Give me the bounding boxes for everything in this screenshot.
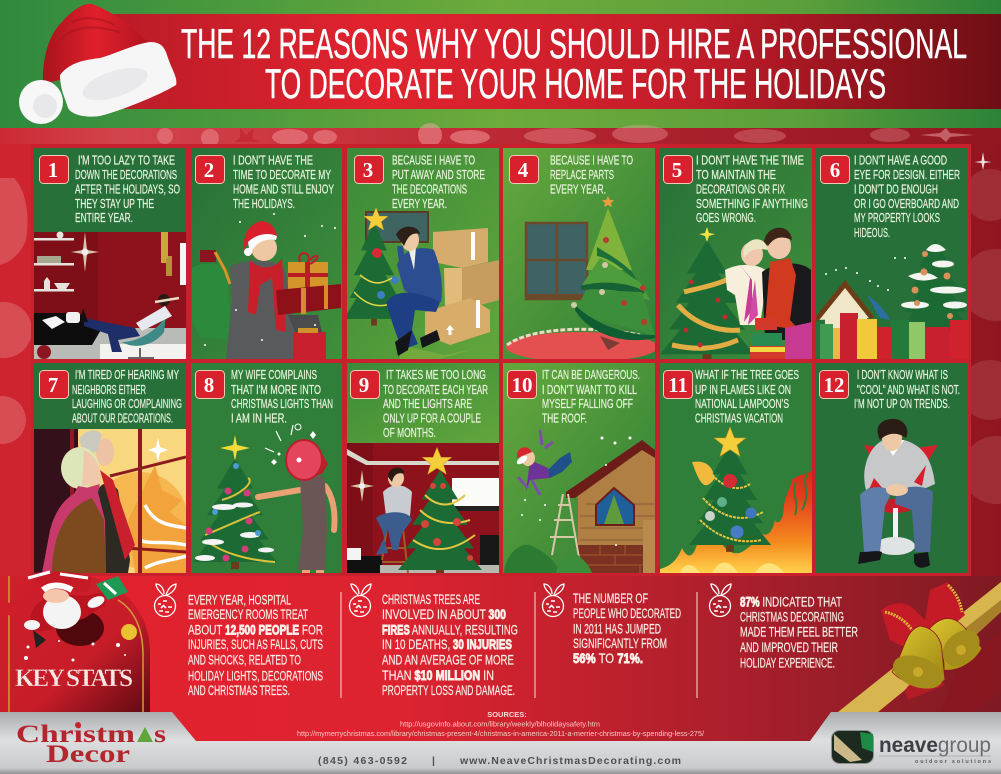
illustration: tree in flames	[660, 427, 812, 573]
illustration: window and cartoon tree	[506, 196, 658, 362]
reason text	[72, 367, 182, 426]
stat 3: IN 2011 HAS JUMPED	[573, 620, 661, 636]
illustration: house, snowy tree and gifts	[816, 240, 973, 359]
title	[181, 20, 967, 107]
reason text: I AM IN HER.	[231, 410, 287, 426]
sources: http://usgovinfo.about.com/library/weekly/blholidaysafety.htm	[400, 722, 600, 728]
reason text	[75, 152, 180, 225]
panel: reason 10	[503, 363, 655, 573]
panel: reason 12	[816, 363, 968, 573]
number badge	[820, 156, 850, 184]
reason text	[383, 367, 488, 440]
stat 1: AND CHRISTMAS TREES.	[188, 682, 290, 698]
panel: reason 7	[34, 363, 188, 573]
reason text: I DON'T KNOW WHAT IS	[857, 367, 948, 382]
reason text: EVERY YEAR.	[392, 196, 447, 211]
reason text: DOWN THE DECORATIONS	[75, 167, 177, 182]
stat 4: HOLIDAY EXPERIENCE.	[740, 654, 835, 670]
number badge: 2	[204, 158, 214, 182]
number badge: 12	[824, 373, 844, 397]
reason text: THE HOLIDAYS.	[233, 196, 295, 211]
number badge	[664, 156, 692, 184]
number badge: 6	[830, 158, 840, 182]
logo: neave group	[832, 730, 991, 765]
panel: key stats banner	[0, 571, 150, 712]
sources	[297, 710, 704, 738]
reason text: BECAUSE I HAVE TO	[392, 152, 475, 168]
stat 3: PEOPLE WHO DECORATED	[573, 605, 681, 621]
logo: christmas decor	[16, 721, 166, 768]
illustration: man on ladder by the tree	[347, 443, 499, 577]
reason text: THE DECORATIONS	[392, 182, 467, 196]
reason text: I DON'T WANT TO KILL	[542, 382, 637, 397]
number badge: 8	[204, 373, 214, 397]
reason text	[392, 152, 485, 211]
stat 1: ABOUT 12,500 PEOPLE FOR	[188, 622, 323, 638]
reason text: AND THE LIGHTS ARE	[383, 396, 472, 411]
reason text: PUT AWAY AND STORE	[392, 167, 485, 182]
panel frame	[31, 144, 971, 576]
number badge: 10	[512, 373, 532, 397]
reason text	[233, 152, 334, 211]
stat 1: AND SHOCKS, RELATED TO	[188, 652, 301, 668]
stat 2: PROPERTY LOSS AND DAMAGE.	[382, 682, 515, 698]
reason text: CHRISTMAS LIGHTS THAN	[231, 396, 333, 411]
illustration: wife with megaphone and tree	[193, 424, 335, 573]
panel: key stats band	[0, 576, 1001, 746]
stat 1: HOLIDAY LIGHTS, DECORATIONS	[188, 668, 323, 684]
logo: neave group: neavegroup	[879, 734, 991, 757]
number badge: 7	[48, 373, 58, 397]
reason text	[550, 155, 633, 194]
panel: reason 9	[347, 363, 499, 577]
panel: reason 8	[191, 363, 342, 573]
icon: ornament	[542, 584, 564, 616]
stat 3	[542, 584, 681, 666]
reason text: LAUGHING OR COMPLAINING	[72, 396, 182, 411]
illustration: man relaxing in living room	[34, 232, 186, 359]
reason text: EVERY YEAR.	[550, 182, 606, 196]
reason text: IT TAKES ME TOO LONG	[386, 367, 486, 382]
icon: ribbon and bells	[838, 582, 1001, 712]
reason text	[231, 367, 333, 426]
decorative pattern band	[0, 123, 1001, 147]
number badge	[354, 156, 384, 184]
stat 4: 87% INDICATED THAT	[740, 594, 842, 610]
reason text: DECORATIONS OR FIX	[696, 182, 785, 196]
reason text: NATIONAL LAMPOON'S	[695, 396, 789, 411]
number badge	[40, 370, 68, 398]
icon: santa	[5, 571, 137, 662]
stat 2: THAN $10 MILLION IN	[382, 667, 494, 683]
stat 1: EVERY YEAR, HOSPITAL	[188, 592, 291, 608]
reason text: I DON'T HAVE A GOOD	[854, 152, 947, 168]
illustration: man falling off the roof	[504, 430, 655, 573]
icon: santa hat	[19, 4, 176, 124]
stat 1	[154, 584, 323, 698]
number badge	[664, 370, 692, 398]
number badge: 1	[48, 158, 58, 182]
contact info: (845) 463-0592	[318, 755, 407, 767]
logo: neave group: outdoor solutions	[915, 759, 991, 765]
illustration: elderly neighbors at window	[34, 429, 188, 573]
footer grey band	[0, 712, 1001, 774]
reason text: BECAUSE I HAVE TO	[550, 152, 633, 168]
reason text: MY WIFE COMPLAINS	[231, 367, 317, 382]
icon: ornament	[350, 584, 371, 616]
contact info: www.NeaveChristmasDecorating.com	[459, 755, 681, 767]
reason text: MY PROPERTY LOOKS	[854, 210, 940, 225]
stat 2: FIRES ANNUALLY, RESULTING	[382, 622, 518, 638]
stat 2	[350, 584, 518, 698]
reason text	[854, 152, 960, 240]
reason text: ENTIRE YEAR.	[75, 210, 133, 225]
reason text: MYSELF FALLING OFF	[542, 396, 633, 411]
number badge: 11	[668, 373, 688, 397]
sources: SOURCES:	[487, 710, 527, 719]
illustration: man beside tree and boxes	[344, 208, 499, 359]
reason text: OF MONTHS.	[383, 425, 436, 440]
stat 3: SIGNIFICANTLY FROM	[573, 635, 667, 651]
panel: reason 1	[34, 148, 186, 359]
illustration: man on a red stool	[858, 419, 938, 568]
stat 2: INVOLVED IN ABOUT 300	[382, 606, 506, 622]
reason text: TIME TO DECORATE MY	[233, 167, 331, 182]
reason text: CHRISTMAS VACATION	[695, 410, 783, 426]
reason text: IT CAN BE DANGEROUS.	[542, 367, 640, 382]
reason text: REPLACE PARTS	[550, 167, 614, 182]
number badge: 9	[359, 373, 369, 397]
reason text: TO MAINTAIN THE	[696, 167, 776, 182]
stat 1: INJURIES, SUCH AS FALLS, CUTS	[188, 636, 323, 652]
stat 1: EMERGENCY ROOMS TREAT	[188, 606, 308, 622]
number badge	[508, 370, 536, 398]
reason text	[854, 367, 960, 411]
reason text: GOES WRONG.	[696, 210, 756, 225]
panel: reason 5	[660, 148, 812, 362]
stat 4: AND IMPROVED THEIR	[740, 639, 838, 655]
reason text: HIDEOUS.	[854, 225, 890, 240]
logo: christmas decor: Decor	[46, 741, 130, 768]
illustration: couple by the tree	[660, 227, 812, 362]
reason text: SOMETHING IF ANYTHING	[696, 196, 808, 211]
number badge	[510, 156, 538, 184]
panel: reason 4	[503, 148, 658, 362]
reason text: THE ROOF.	[542, 410, 587, 426]
number badge	[40, 156, 68, 184]
decorative sparkle	[974, 152, 992, 170]
stat 4: MADE THEM FEEL BETTER	[740, 624, 858, 640]
stat 2: AND AN AVERAGE OF MORE	[382, 652, 514, 668]
reason text	[695, 367, 799, 426]
reason text	[542, 367, 640, 426]
reason text: THEY STAY UP THE	[75, 196, 154, 211]
header band	[0, 0, 1001, 128]
illustration: man carrying gifts	[192, 213, 341, 359]
number badge	[350, 370, 380, 398]
heading: key stats: KEY STATS	[15, 665, 133, 692]
logo: christmas decor: s	[154, 721, 166, 748]
logo: christmas decor: Christm	[16, 721, 135, 748]
reason text: TO DECORATE EACH YEAR	[383, 382, 488, 397]
reason text: AFTER THE HOLIDAYS, SO	[75, 182, 180, 196]
icon: ornament	[710, 584, 731, 616]
reason text: ABOUT OUR DECORATIONS.	[72, 410, 173, 426]
stat 2: IN 10 DEATHS, 30 INJURIES	[382, 636, 512, 652]
sources: http://mymerrychristmas.com/library/christmas-present-4/christmas-in-america-2011-a-merrier-christmas-by-spending-less-275/	[297, 731, 704, 738]
icon: ornament	[154, 584, 176, 616]
reason text: UP IN FLAMES LIKE ON	[695, 382, 791, 397]
reason text: I DON'T HAVE THE	[233, 152, 313, 168]
stat 4	[710, 584, 858, 670]
reason text: I'M TIRED OF HEARING MY	[75, 367, 179, 382]
panel: reason 6	[816, 148, 973, 359]
panel: reason 2	[191, 148, 342, 359]
reason text: NEIGHBORS EITHER	[72, 382, 146, 397]
reason text: I DON'T HAVE THE TIME	[696, 152, 804, 168]
reason text: ONLY UP FOR A COUPLE	[383, 410, 481, 426]
panel: reason 3	[344, 148, 499, 359]
number badge	[820, 370, 848, 398]
number badge: 3	[363, 158, 373, 182]
number badge: 4	[518, 158, 529, 182]
contact info	[318, 755, 681, 767]
reason text: HOME AND STILL ENJOY	[233, 182, 334, 196]
stat 3: 56% TO 71%.	[573, 650, 643, 666]
decorative side bokeh	[0, 169, 1001, 504]
number badge	[196, 156, 224, 184]
reason text: I'M TOO LAZY TO TAKE	[78, 152, 175, 168]
reason text	[696, 152, 808, 225]
panel: reason 11	[660, 363, 812, 573]
stat 3: THE NUMBER OF	[573, 590, 648, 606]
contact info: |	[432, 755, 435, 767]
stat 2: CHRISTMAS TREES ARE	[382, 591, 480, 607]
number badge	[196, 370, 224, 398]
reason text: I DON'T DO ENOUGH	[854, 182, 938, 196]
reason text: WHAT IF THE TREE GOES	[695, 367, 799, 382]
reason text: THAT I'M MORE INTO	[231, 382, 321, 397]
number badge: 5	[672, 158, 682, 182]
stat 4: CHRISTMAS DECORATING	[740, 608, 844, 624]
